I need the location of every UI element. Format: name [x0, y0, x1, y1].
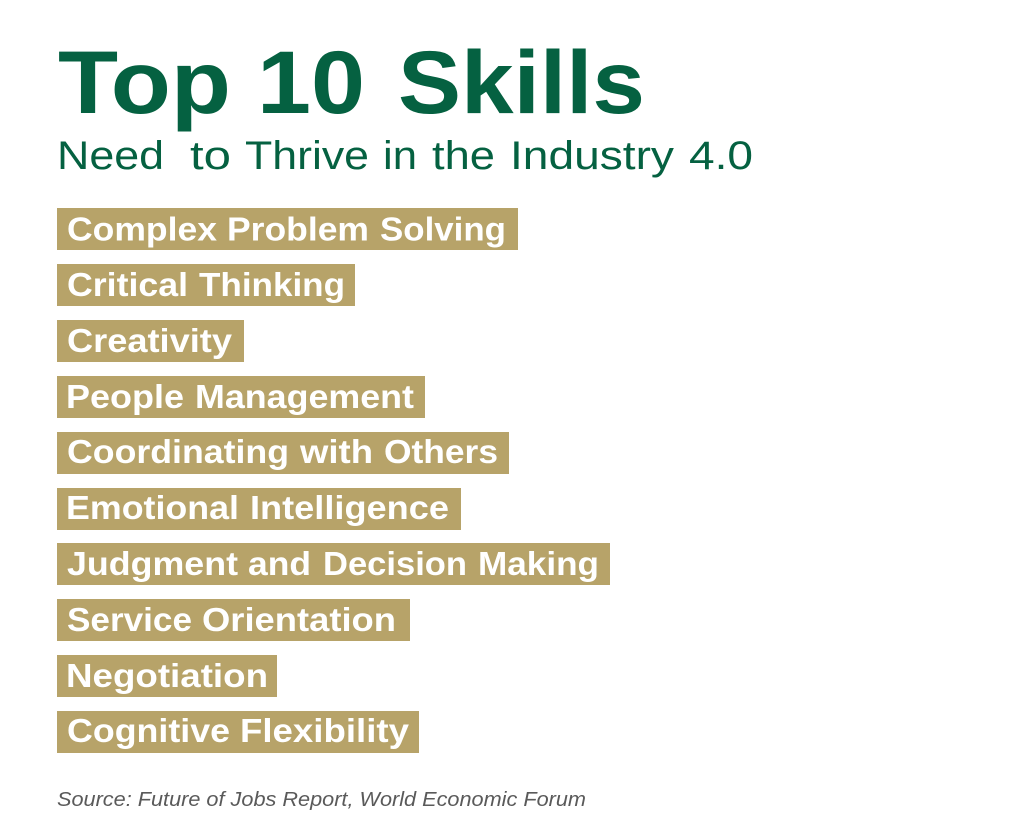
skill: Negotiation: Negotiation: [66, 657, 268, 694]
subtitle: the: [432, 134, 495, 178]
skill: Cognitive Flexibility: Cognitive: [67, 712, 230, 749]
skill: Coordinating with Others: [57, 432, 509, 474]
subtitle: Need: [57, 134, 164, 178]
title: 10: [257, 32, 365, 132]
skills list: [57, 208, 610, 753]
skill: Coordinating with Others: Others: [384, 433, 498, 470]
skill: Judgment and Decision Making: and: [248, 545, 311, 582]
skill: Cognitive Flexibility: Flexibility: [240, 712, 410, 749]
subtitle: in: [383, 134, 417, 178]
skill: Judgment and Decision Making: Judgment: [67, 545, 238, 582]
title: Top: [58, 32, 231, 132]
skill: Judgment and Decision Making: Making: [478, 545, 599, 582]
skill: Emotional Intelligence: Emotional: [66, 489, 239, 526]
subtitle: [57, 134, 753, 178]
skill: Judgment and Decision Making: Decision: [323, 545, 467, 582]
skill: Service Orientation: Orientation: [202, 601, 396, 638]
title: Skills: [398, 32, 645, 132]
skill: People Management: People: [66, 378, 184, 415]
title: [58, 32, 645, 132]
skill: Critical Thinking: Thinking: [199, 266, 345, 303]
skill: People Management: [57, 376, 425, 418]
skill: People Management: Management: [195, 378, 414, 415]
subtitle: Industry: [510, 134, 674, 178]
skill: Coordinating with Others: with: [299, 433, 373, 470]
subtitle: 4.0: [689, 134, 753, 178]
skill: Service Orientation: [57, 599, 410, 641]
skill: Service Orientation: Service: [67, 601, 192, 638]
skill: Judgment and Decision Making: [57, 543, 610, 585]
skill: Coordinating with Others: Coordinating: [67, 433, 289, 470]
skill: Cognitive Flexibility: [57, 711, 419, 753]
skill: Complex Problem Solving: [57, 208, 518, 250]
skill: Complex Problem Solving: Complex: [67, 210, 218, 248]
source note: Source: Future of Jobs Report, World Economic Forum: [57, 789, 586, 811]
skill: Emotional Intelligence: Intelligence: [250, 489, 449, 526]
skill: Complex Problem Solving: Problem: [227, 210, 369, 248]
skill: Emotional Intelligence: [57, 488, 461, 530]
skill: Creativity: Creativity: [67, 322, 233, 359]
skill: Critical Thinking: Critical: [67, 266, 188, 303]
skill: Complex Problem Solving: Solving: [380, 210, 506, 248]
skill: Critical Thinking: [57, 264, 355, 306]
subtitle: Thrive: [245, 134, 369, 178]
subtitle: to: [190, 134, 231, 178]
